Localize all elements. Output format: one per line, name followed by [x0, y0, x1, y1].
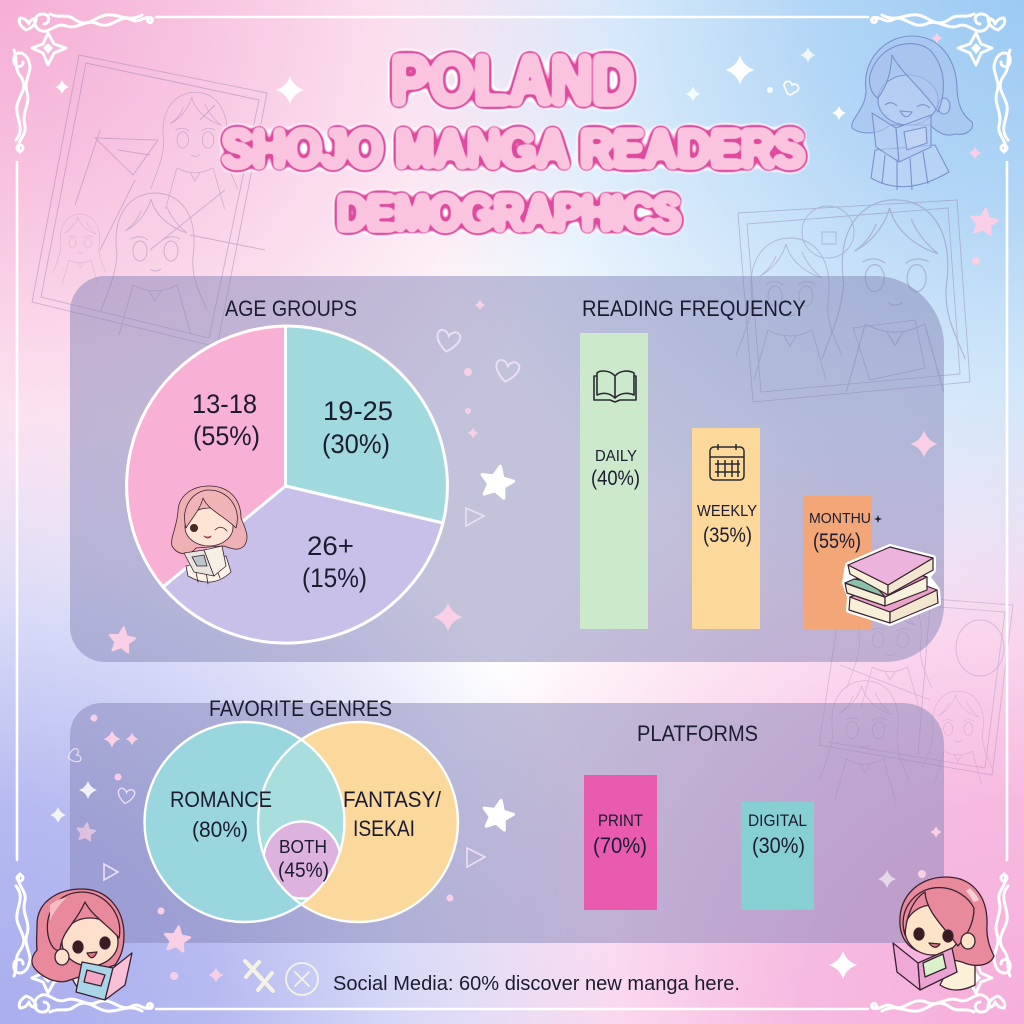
- manga sketch: top right: [736, 200, 970, 402]
- chibi girl: bottom left: [32, 889, 132, 1000]
- panel: age and reading frequency: [70, 276, 944, 662]
- overlap region: [259, 740, 344, 904]
- social media note: Social Media: 60% discover new manga here.: [333, 972, 740, 995]
- platform labels: PRINT: [598, 811, 643, 830]
- heading: platforms: PLATFORMS: [637, 721, 758, 746]
- pie labels: (55%): [193, 421, 260, 451]
- bar: monthly: [803, 496, 872, 629]
- title: [222, 41, 805, 241]
- bar: weekly: [692, 428, 760, 629]
- icon: open book: [594, 371, 636, 402]
- bar labels: (55%): [813, 530, 861, 553]
- venn labels: ROMANCE: [170, 787, 272, 812]
- pie labels: (30%): [322, 429, 390, 459]
- title: POLAND: [391, 41, 634, 119]
- icon: tiny black sparkle beside monthly: [874, 515, 882, 523]
- platform labels: (70%): [593, 833, 647, 858]
- panel: genres and platforms: [70, 703, 944, 943]
- title: SHOJO MANGA READERS: [222, 119, 805, 179]
- pie labels: 19-25: [323, 396, 393, 426]
- heading: reading frequency: READING FREQUENCY: [582, 296, 806, 321]
- slice: 13-18: [127, 326, 286, 587]
- bar: daily: [580, 333, 648, 629]
- pie labels: (15%): [302, 563, 367, 593]
- bar: print: [584, 775, 657, 910]
- both region: [264, 822, 340, 898]
- bar labels: DAILY: [595, 448, 637, 465]
- pie labels: 13-18: [192, 389, 257, 419]
- manga sketch: top left: [32, 55, 267, 347]
- pie labels: [192, 389, 393, 593]
- venn labels: (80%): [192, 817, 248, 842]
- bar labels: [591, 448, 871, 553]
- platform labels: [593, 811, 807, 858]
- slice: 26+: [163, 486, 443, 643]
- bar: digital: [741, 802, 814, 910]
- heading: favorite genres: FAVORITE GENRES: [209, 696, 392, 721]
- chibi girl: bottom right: [893, 877, 994, 990]
- platform labels: (30%): [752, 833, 805, 858]
- circle: romance: [144, 722, 344, 922]
- venn labels: ISEKAI: [353, 816, 415, 841]
- bar labels: WEEKLY: [697, 503, 757, 520]
- icon: chibi girl reading on pie: [172, 486, 247, 584]
- manga sketch: lower right: [819, 592, 1013, 802]
- venn labels: FANTASY/: [343, 787, 442, 812]
- pie chart: age groups: [127, 326, 447, 643]
- title: DEMOGRAPHICS: [337, 185, 681, 241]
- venn diagram: genres: [144, 722, 458, 922]
- venn labels: BOTH: [279, 837, 327, 857]
- icon: stack of books: [845, 547, 938, 623]
- venn labels: (45%): [278, 859, 329, 882]
- heading: age groups: AGE GROUPS: [225, 296, 357, 321]
- blue chibi line drawing: top right: [852, 36, 973, 190]
- icon: social crossed marks: [245, 961, 318, 995]
- bar labels: MONTHU: [809, 510, 871, 527]
- venn labels: [170, 787, 442, 882]
- icon: calendar: [710, 444, 744, 480]
- slice: 19-25: [286, 326, 447, 523]
- bar labels: (35%): [703, 524, 752, 547]
- platform labels: DIGITAL: [748, 811, 807, 830]
- venn outlines: [144, 722, 458, 922]
- pie labels: 26+: [307, 531, 354, 561]
- bar labels: (40%): [591, 467, 640, 490]
- circle: fantasy: [258, 722, 458, 922]
